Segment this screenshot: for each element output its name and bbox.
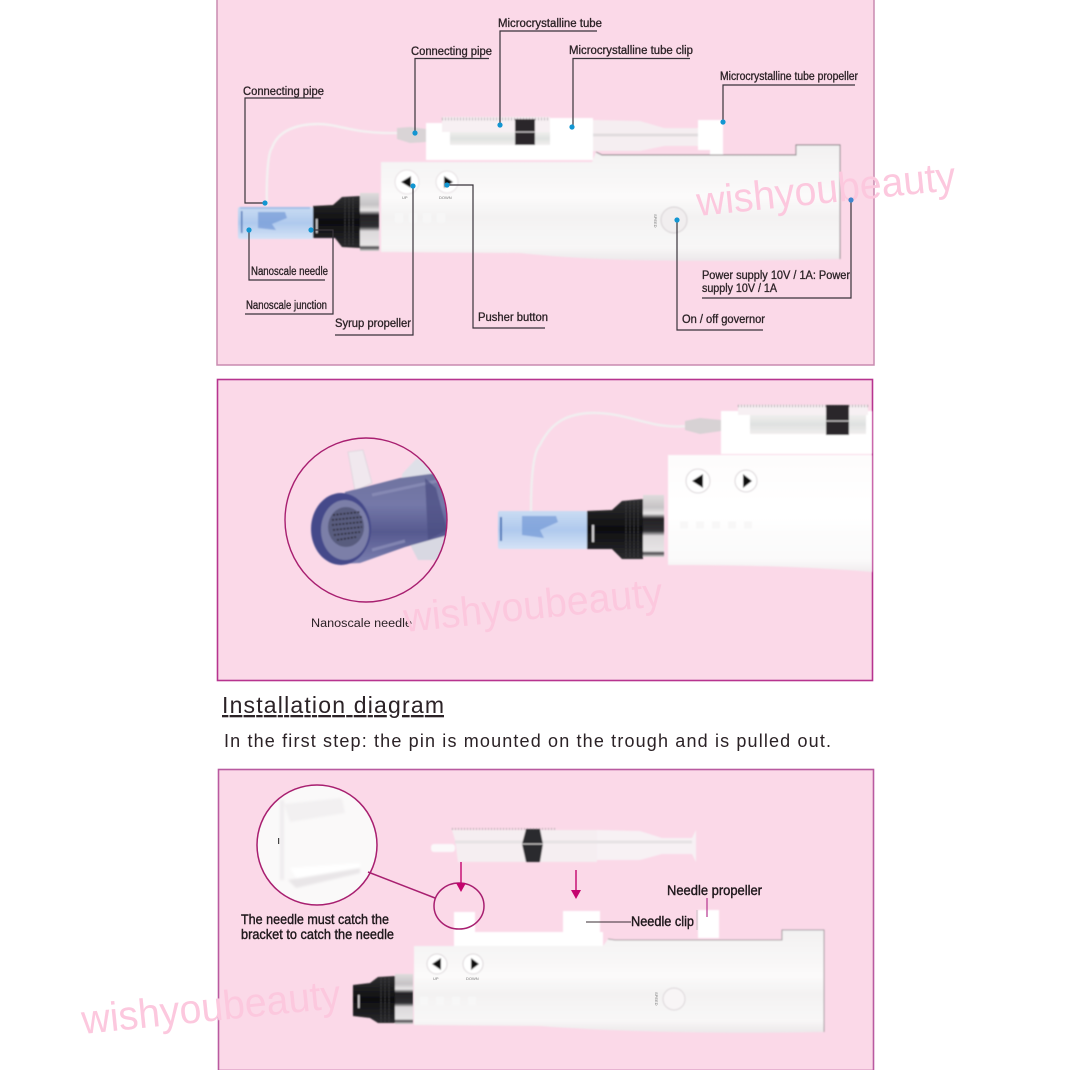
callout lines and dots (245, 31, 855, 335)
device small labels: UP (402, 195, 408, 200)
syringe (431, 829, 696, 862)
label: needle propeller (667, 882, 762, 930)
pen with clip, no needle (353, 910, 824, 1033)
device small labels: SPEED (654, 992, 659, 1006)
panel background (218, 770, 874, 1070)
device small labels: DOWN (439, 195, 452, 200)
device small labels: DOWN (466, 976, 479, 981)
connector line from lens to circle (368, 872, 435, 898)
device small labels: SPEED (653, 214, 658, 228)
device: full pen with syringe (238, 117, 840, 261)
label: nanoscale junction: Nanoscale junction (246, 300, 327, 312)
device: pen front with needle (498, 405, 872, 572)
watermark middle: wishyoubeauty (400, 569, 665, 641)
label: needle clip (586, 913, 694, 929)
label: microcrystalline tube: Microcrystalline tube (498, 18, 602, 30)
caption: nanoscale needle: Nanoscale needle (311, 618, 412, 630)
panel: nanoscale needle close-up (218, 380, 872, 680)
label: needle bracket note (241, 911, 394, 942)
device small labels (402, 195, 658, 228)
label: pusher button: Pusher button (478, 312, 548, 324)
label: needle bracket note: bracket to catch the needle (241, 926, 394, 942)
label: power supply: supply 10V / 1A (702, 283, 777, 295)
highlight circle on bracket (434, 883, 484, 929)
magnified needle lens (285, 438, 450, 602)
label: connecting pipe left: Connecting pipe (243, 86, 324, 98)
panel: installation step (218, 770, 874, 1070)
label: needle propeller: Needle propeller (667, 882, 762, 898)
label: power supply (702, 270, 850, 295)
text: first step instruction: In the first step: the pin is mounted on the trough and is pulled out. (224, 731, 831, 751)
label: power supply: Power supply 10V / 1A: Power (702, 270, 850, 282)
watermark bottom: wishyoubeauty (78, 971, 343, 1043)
magnified bracket lens (257, 785, 377, 905)
label: syrup propeller: Syrup propeller (335, 318, 411, 330)
device small labels: UP (433, 976, 439, 981)
device small labels (433, 976, 659, 1006)
panel background (218, 380, 872, 680)
label: on off governor: On / off governor (682, 314, 765, 326)
label: nanoscale needle: Nanoscale needle (251, 266, 328, 278)
panel background (217, 0, 874, 365)
panel: labelled parts diagram (217, 0, 874, 365)
label: connecting pipe top: Connecting pipe (411, 46, 492, 58)
arrow: syringe to clip (571, 870, 581, 899)
label: microcrystalline tube clip: Microcrystalline tube clip (569, 45, 693, 57)
label: microcrystalline tube propeller: Microcrystalline tube propeller (720, 71, 858, 83)
watermark top: wishyoubeauty (693, 153, 958, 225)
label: needle bracket note: The needle must catch the (241, 911, 389, 927)
callout dot: power supply (848, 197, 854, 203)
heading: installation diagram: Installation diagram (222, 692, 444, 718)
arrow: syringe to bracket (456, 862, 466, 892)
label: needle clip: Needle clip (631, 913, 694, 929)
